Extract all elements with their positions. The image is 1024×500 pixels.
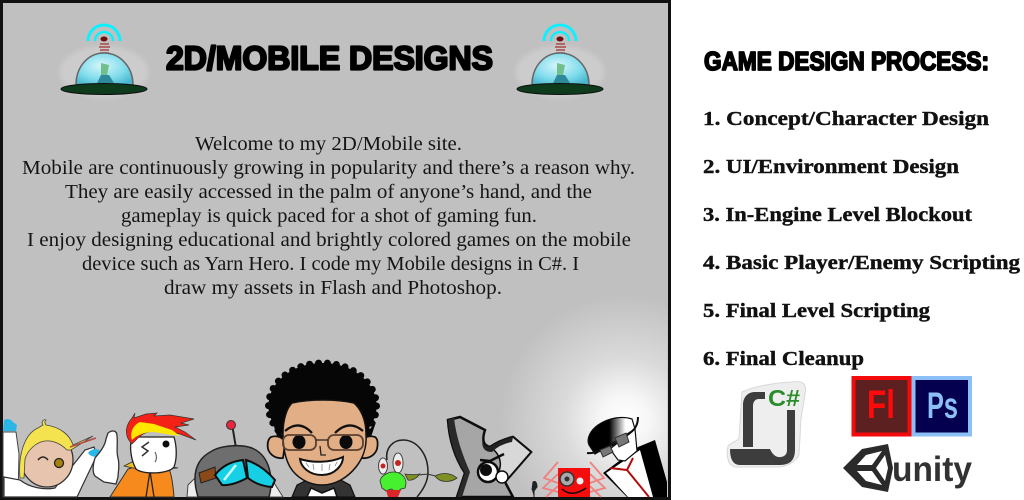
illustration: green plant creature xyxy=(378,440,457,497)
list: process steps: 6. Final Cleanup xyxy=(703,348,864,370)
icon: C# code logo: C# xyxy=(768,385,800,411)
title: 2D/MOBILE DESIGNS xyxy=(166,40,493,76)
text block: intro: They are easily accessed in the palm of anyone’s hand, and the xyxy=(65,182,592,203)
text block: intro xyxy=(22,134,635,299)
icon: Unity logo: unity xyxy=(892,450,973,489)
icon: Photoshop logo xyxy=(914,378,970,434)
heading: game design process: GAME DESIGN PROCESS: xyxy=(704,46,989,76)
icon: satellite dome left xyxy=(60,25,148,98)
icon: Flash logo: Fl xyxy=(867,383,895,427)
list: process steps: 2. UI/Environment Design xyxy=(703,156,959,178)
icon: satellite dome right xyxy=(516,25,604,98)
icon: Flash logo xyxy=(854,378,910,434)
icon: C# code logo xyxy=(727,382,806,467)
illustration: afro self portrait character xyxy=(268,363,378,497)
illustration: red spider character xyxy=(543,462,605,497)
text block: intro: draw my assets in Flash and Photoshop. xyxy=(164,278,502,299)
list: process steps: 5. Final Level Scripting xyxy=(703,300,930,322)
icon: thumbs up hand xyxy=(93,431,119,484)
text block: intro: gameplay is quick paced for a shot of gaming fun. xyxy=(121,206,537,227)
list: process steps: 3. In-Engine Level Blockout xyxy=(703,204,972,226)
illustration: goggles helmet robot character xyxy=(187,420,283,497)
list: process steps xyxy=(703,108,1020,370)
panel: 2D mobile intro xyxy=(2,2,670,498)
list: process steps: 4. Basic Player/Enemy Scripting xyxy=(703,252,1020,274)
list: process steps: 1. Concept/Character Design xyxy=(703,108,989,130)
text block: intro: I enjoy designing educational and brightly colored games on the mobile xyxy=(27,230,631,251)
illustration: flame hair character xyxy=(110,413,196,497)
illustration: hat and sunglasses character xyxy=(587,417,667,497)
text block: intro: Mobile are continuously growing in popularity and there’s a reason why. xyxy=(22,158,635,179)
text block: intro: device such as Yarn Hero. I code my Mobile designs in C#. I xyxy=(82,254,579,275)
icon: Photoshop logo: Ps xyxy=(927,385,958,426)
icon: Unity logo xyxy=(843,444,973,492)
illustration: blond scientist character xyxy=(3,419,119,497)
text block: intro: Welcome to my 2D/Mobile site. xyxy=(195,134,462,155)
illustration: grey shoe character xyxy=(448,417,537,497)
